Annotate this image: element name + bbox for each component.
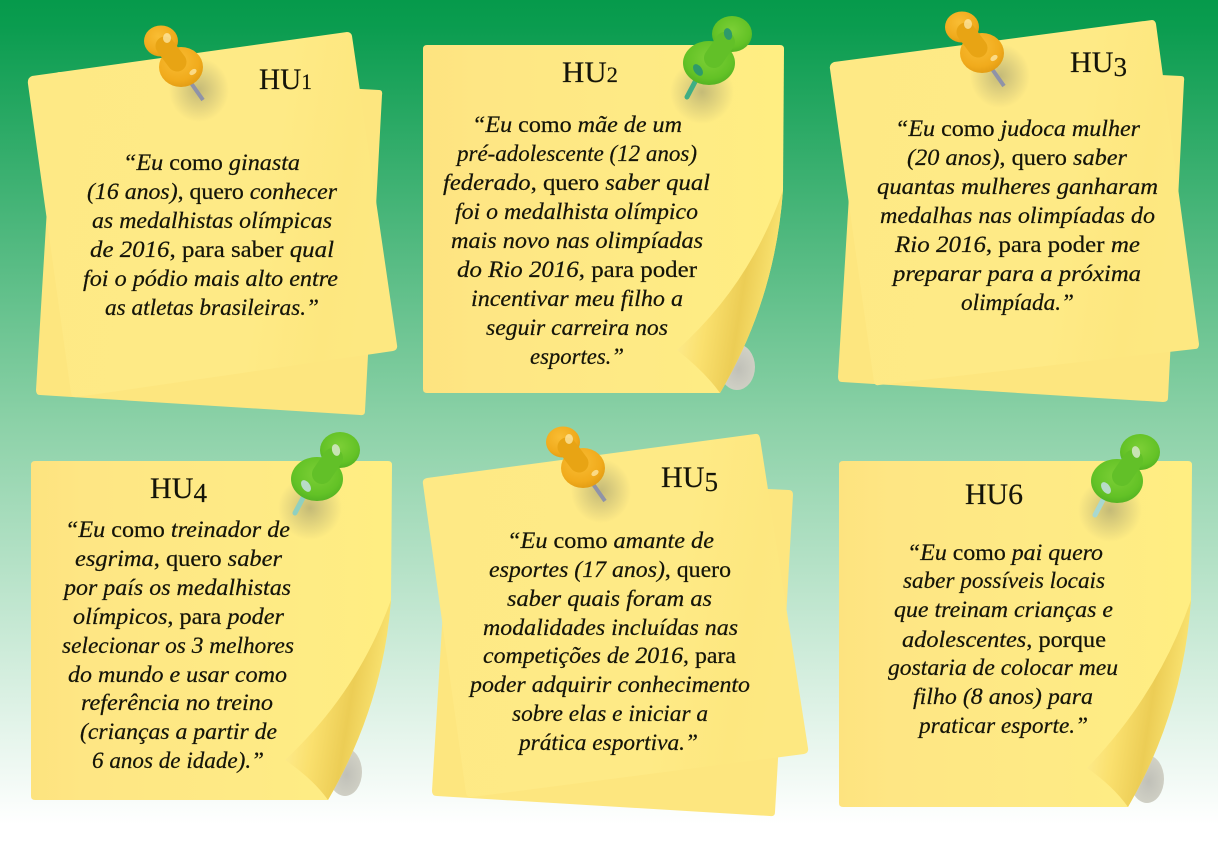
back sheet [838,60,1184,402]
panel: HU3 [830,12,1199,402]
heading: HU5: HU [661,461,704,494]
text: story 1 [83,150,338,321]
sheet with curled corner [839,461,1192,807]
text: story 2: pré-adolescente (12 anos) [455,141,697,167]
text: story 6: adolescentes, porque [902,627,1106,653]
text: story 1: as medalhistas olímpicas [92,208,332,234]
sheet with curled corner [31,461,392,800]
text: story 6: gostaria de colocar meu [888,655,1118,681]
text: story 3 [877,116,1158,316]
text: story 2: foi o medalhista olímpico [455,199,698,225]
panel: HU1 [28,26,397,415]
heading: HU5: 5 [704,467,718,497]
text: story 6 [888,540,1118,739]
icon: orange pin [546,426,631,523]
icon: orange pin [945,12,1030,108]
text: story 2: seguir carreira nos [486,315,668,341]
icon: green pin [670,16,752,124]
heading: HU6: HU6 [965,478,1023,511]
text: story 6: filho (8 anos) para [913,684,1093,710]
text: story 6: saber possíveis locais [903,568,1105,594]
text: story 5 [468,528,750,756]
text: story 6: que treinam crianças e [894,597,1113,623]
text: story 4: do mundo e usar como [68,662,287,688]
icon: orange pin [144,26,229,122]
text: story 2: incentivar meu filho a [471,286,683,312]
heading: HU3: HU [1070,46,1113,79]
curled flap [285,600,391,800]
text: story 2 [443,112,710,370]
icon: page curl shadow [1130,755,1164,803]
text: story 4: por país os medalhistas [62,575,291,601]
text: story 3: olimpíada.” [961,290,1074,316]
text: story 1: foi o pódio mais alto entre [83,266,338,292]
text: story 4: “Eu como treinador de [65,517,290,543]
text: story 6: “Eu como pai quero [907,540,1103,566]
text: story 3: medalhas nas olimpíadas do [880,203,1155,229]
text: story 4: 6 anos de idade).” [92,748,264,774]
panel: HU6 [839,434,1192,807]
heading: HU4: HU [150,472,193,505]
front sheet [830,20,1199,385]
text: story 3: Rio 2016, para poder me [894,232,1140,258]
back sheet [432,474,793,816]
text: story 5: esportes (17 anos), quero [489,557,731,583]
heading: HU1: HU1 [259,63,312,96]
text: story 3: quantas mulheres ganharam [877,174,1158,200]
text: story 4: referência no treino [81,690,273,716]
sheet with curled corner [423,45,784,393]
curled flap [1087,600,1191,807]
text: story 5: “Eu como amante de [507,528,714,554]
heading: HU4: 4 [193,478,208,508]
text: story 2: “Eu como mãe de um [472,112,682,138]
heading: HU3: 3 [1113,52,1127,82]
text: story 5: sobre elas e iniciar a [512,701,708,727]
text: story 4 [62,517,294,774]
text: story 3: preparar para a próxima [891,261,1141,287]
text: story 1: “Eu como ginasta [123,150,300,176]
panel: HU4 [31,432,392,800]
text: story 2: federado, quero saber qual [443,170,710,196]
text: story 5: poder adquirir conhecimento [468,672,750,698]
icon: page curl shadow [328,748,362,796]
text: story 5: modalidades incluídas nas [483,615,738,641]
text: story 3: (20 anos), quero saber [907,145,1128,171]
back sheet [36,72,382,415]
icon: green pin [1078,434,1160,542]
text: story 1: de 2016, para saber qual [90,237,334,263]
front sheet [423,434,808,797]
text: story 1: as atletas brasileiras.” [105,295,319,321]
text: story 2: do Rio 2016 , para poder [457,257,697,283]
curled flap [677,190,783,393]
panel: HU2 [423,16,784,393]
text: story 5: prática esportiva.” [517,730,698,756]
heading: HU2: HU2 [562,56,618,89]
text: story 2: esportes.” [530,344,624,370]
icon: page curl shadow [719,344,755,390]
text: story 6: praticar esporte.” [917,713,1088,739]
text: story 3: “Eu como judoca mulher [895,116,1141,142]
text: story 4: selecionar os 3 melhores [62,633,294,659]
text: story 1: (16 anos), quero conhecer [87,179,338,205]
text: story 5: saber quais foram as [507,586,712,612]
front sheet [28,32,397,397]
icon: green pin [278,432,360,540]
text: story 5: competições de 2016, para [483,643,737,669]
text: story 4: (crianças a partir de [80,719,277,745]
text: story 2: mais novo nas olimpíadas [451,228,703,254]
text: story 4: esgrima, quero saber [75,546,283,572]
text: story 4: olímpicos, para poder [73,604,285,630]
panel: HU5 [423,426,808,816]
